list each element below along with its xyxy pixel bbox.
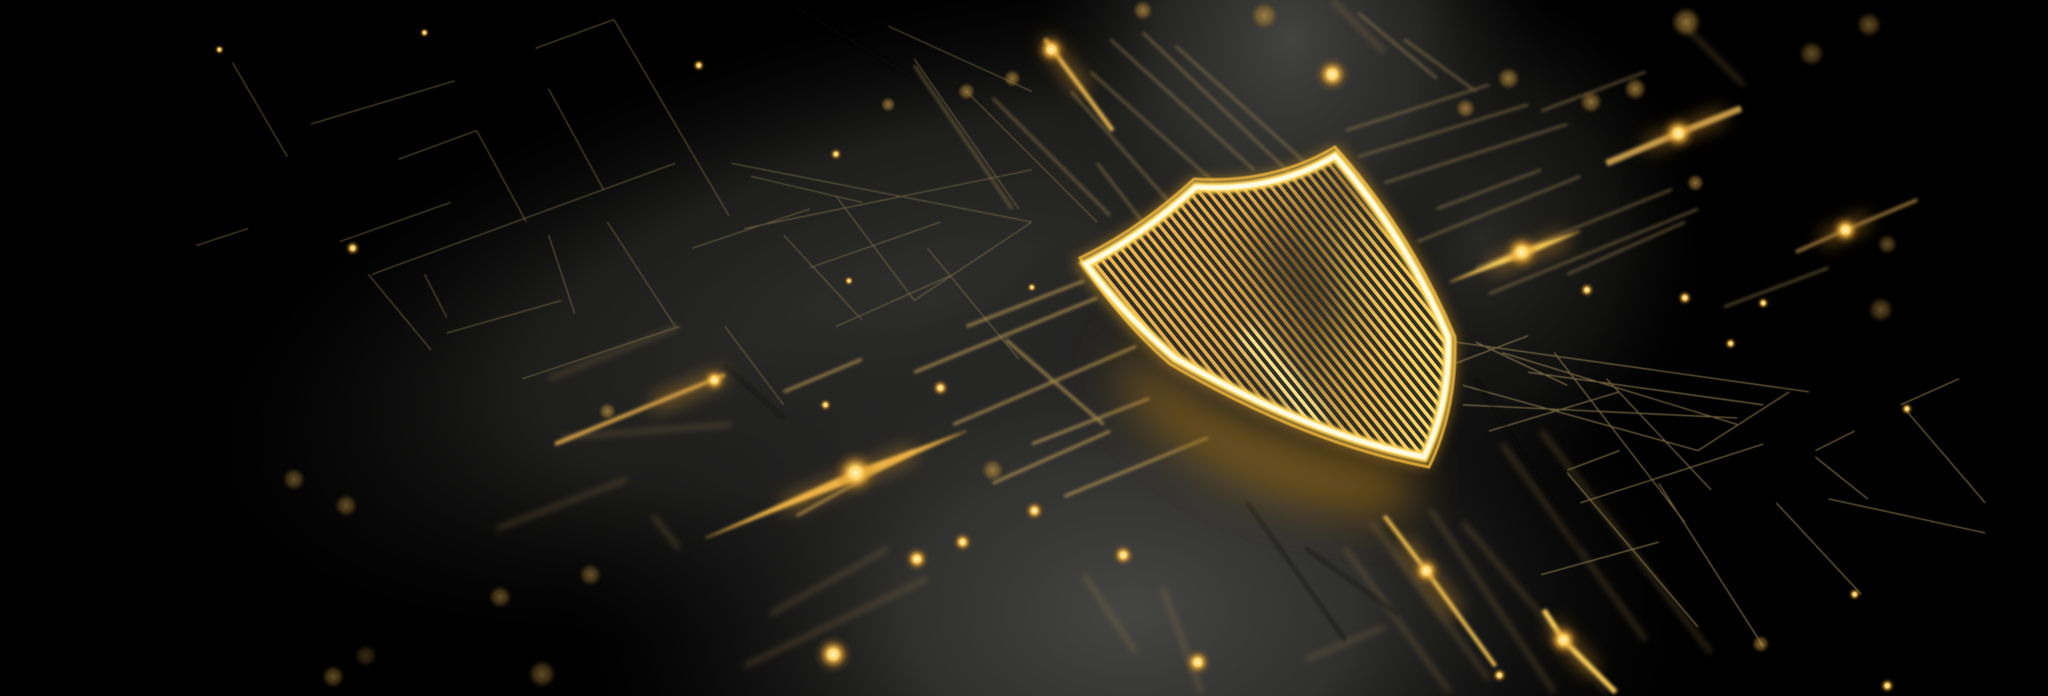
bright streak: lower centre: [705, 431, 967, 538]
shield striped face: [1094, 162, 1445, 453]
fan of traces above shield: [914, 13, 1829, 307]
bright streak: above shield: [1045, 39, 1113, 131]
shield glow cast on board: [1083, 153, 1450, 515]
shield white-hot core: [1086, 156, 1448, 457]
shield: [1070, 140, 1470, 470]
shield bright inner rim: [1086, 156, 1448, 457]
streak glows: [653, 39, 1868, 673]
circuit traces: right board: [1456, 336, 1985, 647]
bright streak: below shield: [1384, 516, 1495, 666]
shield outer rim: [1080, 147, 1455, 467]
circuit traces: left board: [196, 20, 1097, 405]
bright streak: left: [555, 375, 725, 444]
blurred traces below and left: [496, 0, 1744, 692]
bright streak: upper right: [1607, 108, 1741, 163]
out-of-focus bokeh lights: [282, 0, 1898, 688]
bright streak: bottom right: [1544, 610, 1616, 692]
glowing nodes: [214, 27, 1913, 694]
bright streak: far right: [1796, 200, 1917, 252]
bright streak: right of shield: [1450, 231, 1580, 282]
traces leading into shield from left: [784, 281, 1208, 516]
dark grooves in board: [725, 0, 1580, 640]
